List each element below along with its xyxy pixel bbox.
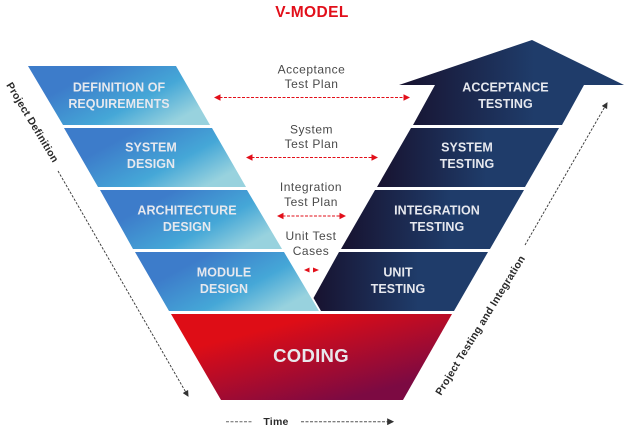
panel: system testing: TESTING (440, 157, 494, 171)
label: project testing and integration: Project Testing and Integration (433, 254, 528, 398)
panel: acceptance testing arrow (399, 40, 624, 125)
arrow: acceptance (215, 96, 409, 98)
text: unit test cases: Unit Test (286, 229, 337, 243)
text: system test plan: System (290, 122, 333, 136)
panel: system design: SYSTEM (125, 140, 177, 154)
arrow: project definition (58, 171, 188, 396)
panel: integration testing: TESTING (410, 220, 464, 234)
text: unit test cases: Cases (293, 244, 329, 258)
panel: unit testing: UNIT (383, 266, 413, 280)
panel: architecture design: ARCHITECTURE (137, 204, 237, 218)
panel: unit testing (314, 252, 488, 311)
panel: coding (171, 314, 452, 400)
panel: acceptance testing arrow: ACCEPTANCE (462, 80, 549, 94)
panel: definition of requirements: DEFINITION OF (73, 80, 165, 94)
panel: definition of requirements: REQUIREMENTS (68, 97, 170, 111)
panel: integration testing (341, 190, 524, 249)
panel: acceptance testing arrow: TESTING (478, 97, 533, 111)
panel: system design (64, 128, 246, 187)
title: V-MODEL (275, 4, 349, 21)
text: integration test plan: Integration (280, 180, 342, 194)
panel: definition of requirements (28, 66, 210, 125)
panel: architecture design: DESIGN (163, 220, 211, 234)
arrow: integration (278, 215, 345, 217)
text: integration test plan: Test Plan (284, 195, 338, 209)
arrow: project testing (525, 103, 607, 245)
text: acceptance test plan (278, 62, 345, 91)
panel: system testing (377, 128, 559, 187)
panel: integration testing: INTEGRATION (394, 204, 480, 218)
arrow: unit (304, 268, 319, 272)
arrow: time (301, 421, 393, 423)
text: acceptance test plan: Acceptance (278, 62, 345, 76)
panel: coding: CODING (273, 345, 349, 366)
arrow: system (247, 156, 377, 158)
panel: module design: MODULE (197, 266, 251, 280)
panel: architecture design (100, 190, 282, 249)
panel: unit testing: TESTING (371, 282, 425, 296)
panel: system design: DESIGN (127, 157, 175, 171)
text: system test plan: Test Plan (285, 137, 338, 151)
panel: module design: DESIGN (200, 282, 248, 296)
text: system test plan (285, 122, 338, 151)
arrow: time left dash (226, 421, 252, 423)
text: acceptance test plan: Test Plan (285, 77, 338, 91)
label: time: Time (263, 416, 289, 428)
label: project definition: Project Definition (3, 80, 61, 165)
text: unit test cases (286, 229, 337, 258)
panel: system testing: SYSTEM (441, 140, 493, 154)
text: integration test plan (280, 180, 342, 209)
panel: module design (135, 252, 319, 311)
